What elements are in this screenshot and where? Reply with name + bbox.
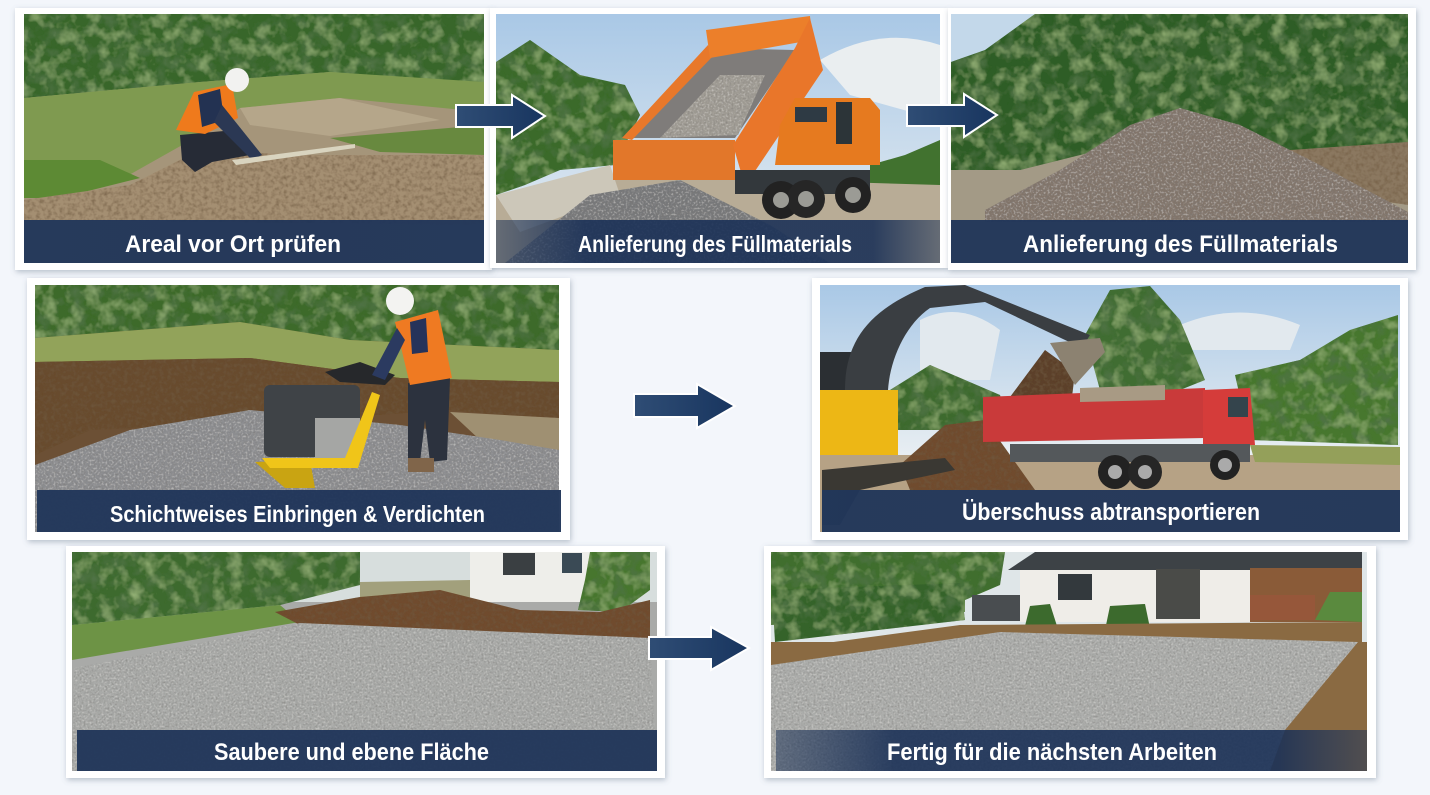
panel: Saubere und ebene Fläche [66, 546, 665, 778]
icon: worker [372, 287, 452, 472]
panel: Schichtweises Einbringen & Verdichten [27, 278, 570, 540]
icon: excavator [820, 285, 1105, 490]
caption: Areal vor Ort prüfen [125, 231, 341, 258]
panel: Anlieferung des Füllmaterials (truck) [490, 8, 948, 268]
caption: Fertig für die nächsten Arbeiten [887, 739, 1217, 766]
arrow: step 4 to 5 [634, 384, 735, 428]
icon: surveyor [176, 68, 355, 172]
arrow: step 2 to 3 [907, 94, 997, 137]
panel: Fertig für die nächsten Arbeiten [764, 546, 1376, 778]
caption: Überschuss abtransportieren [962, 499, 1260, 526]
caption: Anlieferung des Füllmaterials [578, 231, 852, 257]
icon: plate compactor [255, 362, 395, 488]
caption: Saubere und ebene Fläche [214, 739, 489, 766]
arrow: step 1 to 2 [456, 95, 545, 138]
caption: Schichtweises Einbringen & Verdichten [110, 501, 485, 527]
panel: Anlieferung des Füllmaterials (pile) [948, 8, 1416, 270]
icon: dump truck [613, 16, 880, 219]
panel: Areal vor Ort prüfen [15, 8, 492, 270]
icon: red truck [983, 385, 1255, 489]
panel: Überschuss abtransportieren [812, 278, 1408, 540]
arrow: step 6 to 7 [649, 627, 749, 670]
caption: Anlieferung des Füllmaterials [1023, 231, 1338, 258]
